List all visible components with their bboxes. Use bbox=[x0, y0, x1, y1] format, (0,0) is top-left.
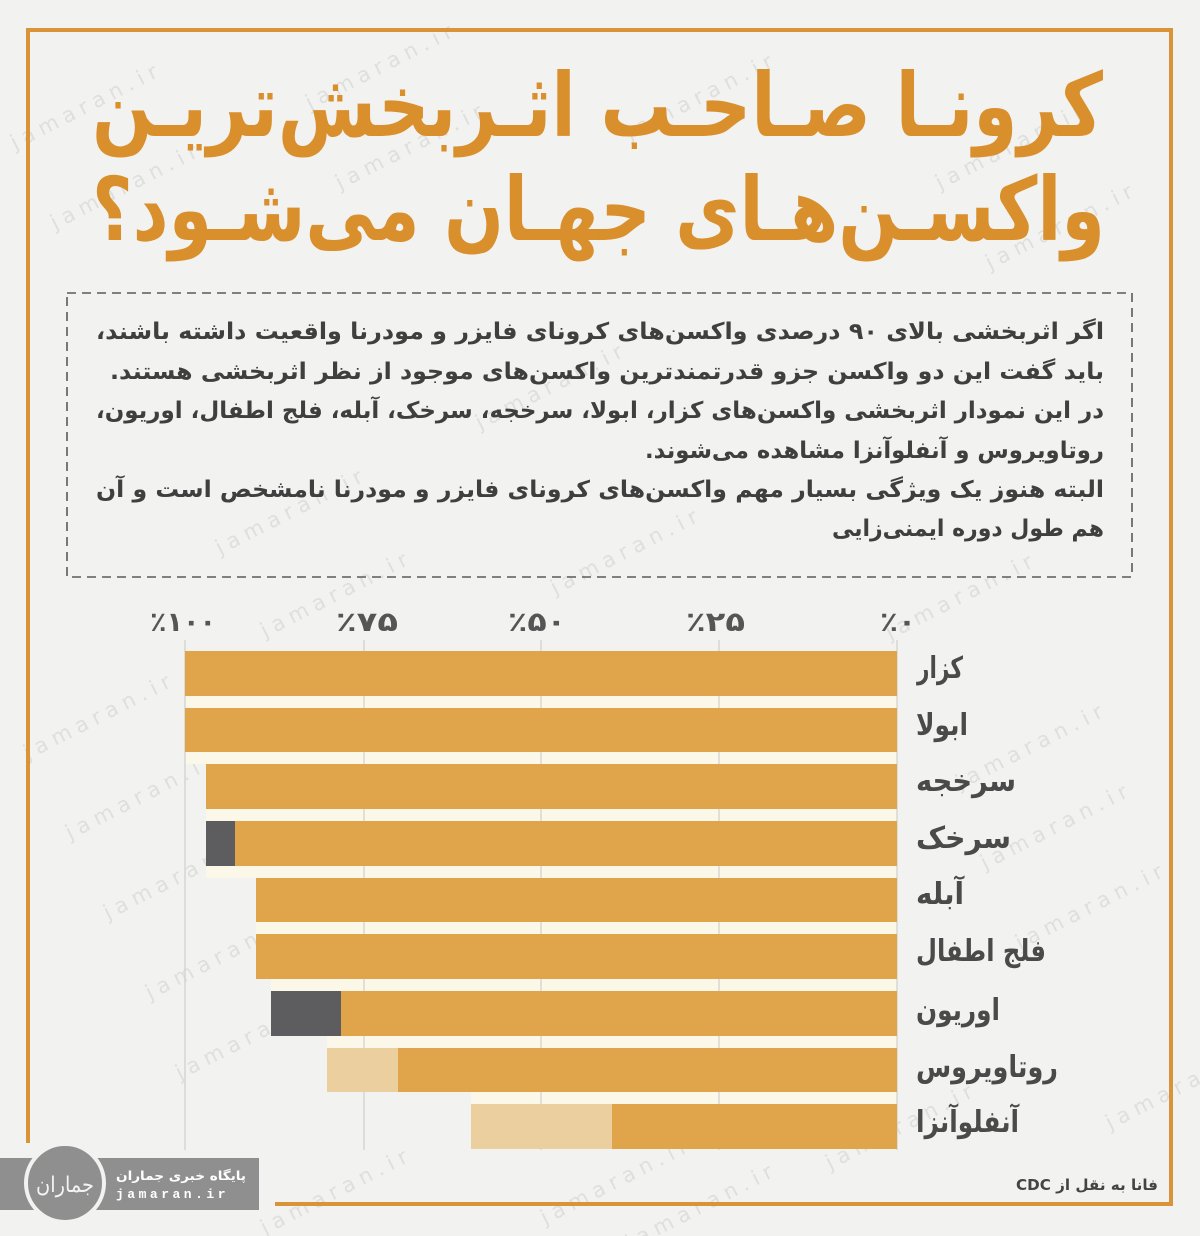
category labels: سرخک bbox=[916, 821, 1011, 856]
watermark pattern: jamaran.ir bbox=[950, 697, 1112, 795]
intro text block: هم طول دوره ایمنی‌زایی bbox=[832, 516, 1104, 542]
bar: اوریون bbox=[271, 991, 897, 1036]
intro text block bbox=[96, 318, 1104, 542]
category labels: فلج اطفال bbox=[916, 934, 1046, 969]
source credit: ‫فانا به نقل از CDC‬ bbox=[1016, 1176, 1158, 1194]
bar: کزار bbox=[185, 651, 897, 696]
bar: آبله bbox=[256, 878, 897, 922]
category labels: آبله bbox=[916, 875, 965, 912]
title bbox=[92, 54, 1105, 262]
watermark pattern: jamaran.ir bbox=[45, 137, 207, 235]
intro text block: اگر اثربخشی بالای ۹۰ درصدی واکسن‌های کرونای فایزر و مودرنا واقعیت داشته باشند،‏ bbox=[96, 318, 1104, 345]
category labels bbox=[916, 651, 1058, 1140]
category labels: اوریون bbox=[916, 993, 1000, 1028]
watermark pattern: jamaran.ir bbox=[18, 667, 180, 765]
watermark pattern: jamaran.ir bbox=[820, 1077, 982, 1175]
bar: فلج اطفال bbox=[256, 934, 897, 979]
watermark pattern: jamaran.ir bbox=[930, 97, 1092, 195]
category labels: سرخجه bbox=[916, 764, 1016, 799]
axis labels bbox=[150, 607, 916, 638]
watermark pattern: jamaran.ir bbox=[545, 502, 707, 600]
axis labels: ٪۵۰ bbox=[508, 607, 566, 638]
watermark pattern: jamaran.ir bbox=[975, 777, 1137, 875]
logo circle: جماران bbox=[36, 1173, 94, 1198]
watermark pattern: jamaran.ir bbox=[1010, 857, 1172, 955]
watermark pattern: jamaran.ir bbox=[60, 747, 222, 845]
bar chart bbox=[185, 640, 897, 1150]
watermark pattern: jamaran.ir bbox=[98, 827, 260, 925]
category labels: ابولا bbox=[916, 708, 968, 743]
watermark pattern: jamaran.ir bbox=[5, 57, 167, 155]
logo caption: پایگاه خبری جماران bbox=[116, 1168, 246, 1183]
bar: سرخک bbox=[206, 821, 897, 866]
axis labels: ٪۷۵ bbox=[336, 607, 398, 638]
logo url: jamaran.ir bbox=[116, 1187, 229, 1202]
watermark pattern: jamaran.ir bbox=[170, 987, 332, 1085]
watermark pattern: jamaran.ir bbox=[255, 545, 417, 643]
intro panel: dashed box bbox=[67, 293, 1132, 577]
category labels: آنفلوآنزا bbox=[916, 1103, 1020, 1140]
bar: ابولا bbox=[185, 708, 897, 752]
watermark pattern: jamaran.ir bbox=[300, 17, 462, 115]
watermark pattern: jamaran.ir bbox=[880, 547, 1042, 645]
intro text block: باید گفت این دو واکسن جزو قدرتمندترین واکسن‌های موجود از نظر اثربخشی هستند.‏ bbox=[110, 358, 1104, 385]
intro text block: روتاویروس و آنفلوآنزا مشاهده می‌شوند.‏ bbox=[645, 435, 1104, 464]
axis labels: ٪۲۵ bbox=[686, 607, 745, 638]
watermark pattern: jamaran.ir bbox=[535, 1132, 697, 1230]
intro text block: در این نمودار اثربخشی واکسن‌های کزار، ابولا، سرخجه، سرخک، آبله، فلج اطفال، اوریون،‏ bbox=[96, 395, 1104, 424]
watermark pattern: jamaran.ir bbox=[980, 177, 1142, 275]
watermark pattern: jamaran.ir bbox=[140, 907, 302, 1005]
category labels: کزار bbox=[916, 651, 963, 686]
watermark pattern: jamaran.ir bbox=[330, 97, 492, 195]
watermark pattern: jamaran.ir bbox=[620, 47, 782, 145]
logo circle bbox=[26, 1144, 104, 1222]
watermark pattern: jamaran.ir bbox=[210, 462, 372, 560]
bar: روتاویروس bbox=[327, 1048, 897, 1092]
watermark pattern: jamaran.ir bbox=[470, 337, 632, 435]
axis labels: ٪۰ bbox=[880, 607, 916, 638]
bar: آنفلوآنزا bbox=[471, 1104, 897, 1149]
intro text block: البته هنوز یک ویژگی بسیار مهم واکسن‌های کرونای فایزر و مودرنا نامشخص است و آن bbox=[96, 474, 1104, 503]
jamaran logo strip bbox=[0, 1144, 259, 1222]
axis labels: ٪۱۰۰ bbox=[150, 607, 216, 638]
bar: سرخجه bbox=[206, 764, 897, 809]
category labels: روتاویروس bbox=[916, 1050, 1058, 1085]
